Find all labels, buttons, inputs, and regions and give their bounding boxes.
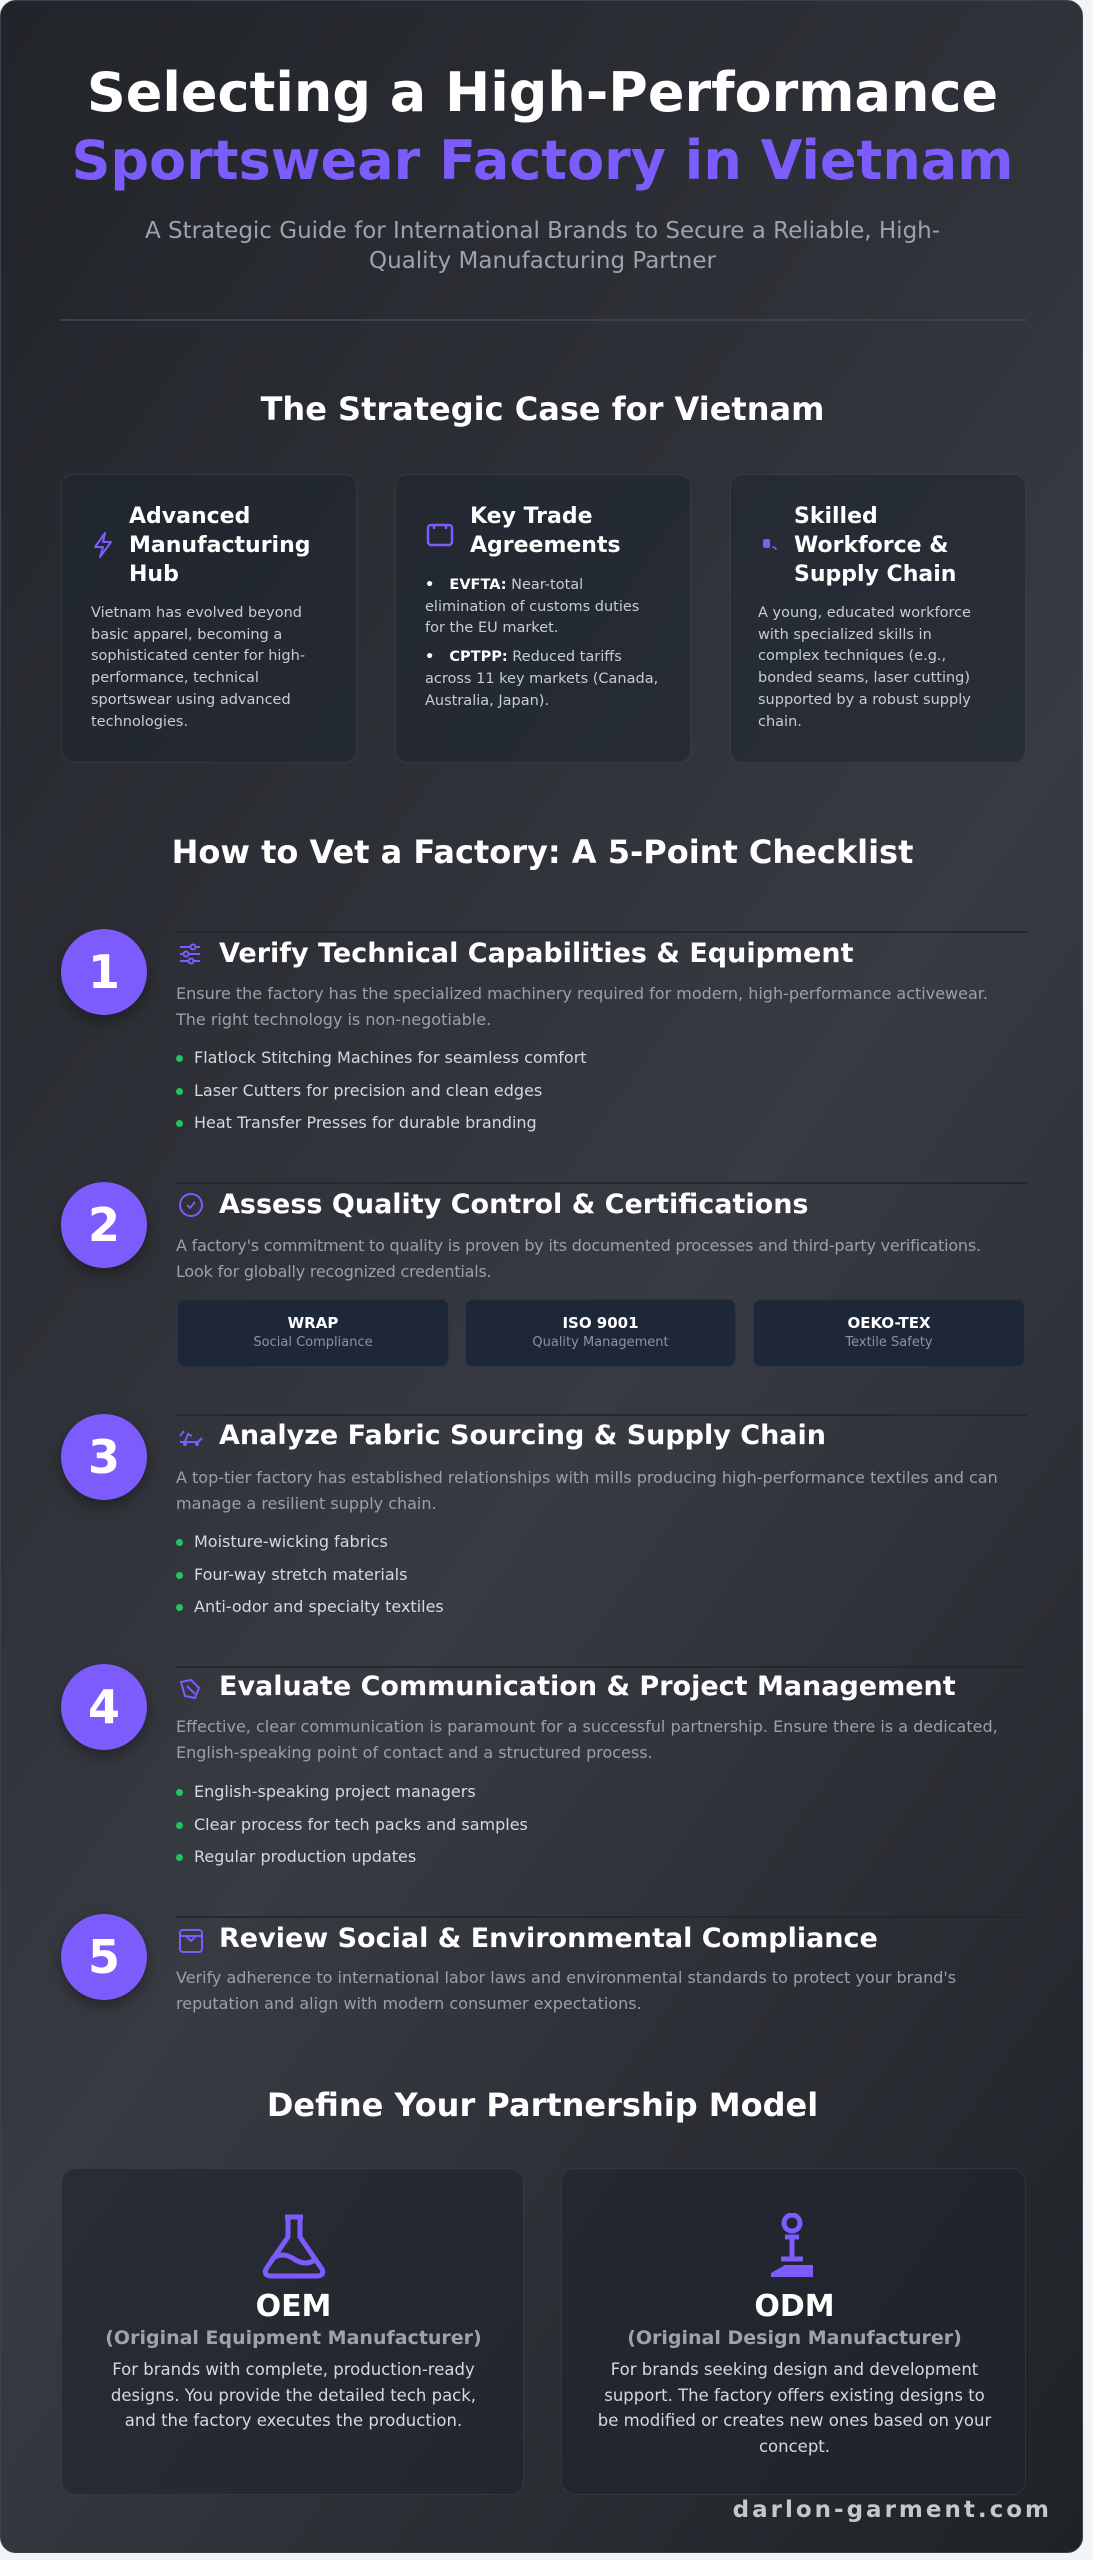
icon: sliders xyxy=(180,944,200,964)
icon: document xyxy=(426,524,454,546)
panel: advanced manufacturing hub: Vietnam has evolved beyond basic apparel, becoming a sophisticated center for high-performance, technical sportswear using advanced technologies. xyxy=(91,605,305,730)
step 1: Laser Cutters for precision and clean edges xyxy=(194,1081,542,1100)
step 5: Verify adherence to international labor laws and environmental standards to protect your brand's reputation and align with modern consumer expectations. xyxy=(176,1968,956,2012)
step 1 xyxy=(60,929,1027,1132)
icon: workforce xyxy=(763,539,777,550)
cert: ISO 9001: ISO 9001 xyxy=(562,1314,639,1332)
panel: advanced manufacturing hub: Manufacturing xyxy=(129,533,310,558)
cert: WRAP xyxy=(177,1299,449,1367)
step 4: Effective, clear communication is paramount for a successful partnership. Ensure there is a dedicated, English-speaking point of contact and a structured process. xyxy=(176,1717,998,1762)
panel: OEM: For brands with complete, production-ready designs. You provide the detailed tech pack, and the factory executes the production. xyxy=(111,2360,476,2430)
step 3 xyxy=(60,1414,1027,1616)
icon: joystick xyxy=(771,2213,813,2277)
panel: advanced manufacturing hub: Advanced xyxy=(129,504,250,529)
step 3: A top-tier factory has established relationships with mills producing high-performance textiles and can manage a resilient supply chain. xyxy=(176,1468,998,1512)
icon: check circle xyxy=(179,1193,203,1217)
title xyxy=(71,61,1014,192)
step 3: Moisture-wicking fabrics xyxy=(194,1532,388,1551)
subtitle: A Strategic Guide for International Brands to Secure a Reliable, High-Quality Manufacturing Partner xyxy=(145,218,940,274)
panel: advanced manufacturing hub xyxy=(61,474,357,763)
title: Selecting a High-Performance xyxy=(87,61,998,124)
panel: OEM: OEM xyxy=(256,2289,331,2324)
number 4: 4 xyxy=(88,1680,120,1734)
panel: key trade agreements: Agreements xyxy=(470,533,621,558)
step 4: English-speaking project managers xyxy=(194,1782,476,1801)
number 2 xyxy=(61,1182,147,1268)
panel: ODM xyxy=(561,2168,1026,2495)
number 4 xyxy=(61,1664,147,1750)
panel: skilled workforce: Skilled xyxy=(794,504,878,529)
step 4: Regular production updates xyxy=(194,1847,416,1866)
step 1: Flatlock Stitching Machines for seamless comfort xyxy=(194,1048,587,1067)
cert: OEKO-TEX: OEKO-TEX xyxy=(847,1314,931,1332)
step 4: Evaluate Communication & Project Management xyxy=(219,1671,956,1702)
panel: advanced manufacturing hub: Hub xyxy=(129,562,179,587)
step 1: Ensure the factory has the specialized machinery required for modern, high-performance activewear. The right technology is non-negotiable. xyxy=(176,984,988,1028)
heading: checklist: How to Vet a Factory: A 5-Point Checklist xyxy=(172,833,913,871)
panel: key trade agreements: • EVFTA: Near-total elimination of customs duties for the EU market. • CPTPP: Reduced tariffs across 11 key markets (Canada, Australia, Japan). xyxy=(425,577,658,709)
step 2: Assess Quality Control & Certifications xyxy=(219,1189,809,1220)
icon: lightning xyxy=(94,532,112,558)
step 3: Anti-odor and specialty textiles xyxy=(194,1597,444,1616)
step 1: Heat Transfer Presses for durable branding xyxy=(194,1113,537,1132)
step 5 xyxy=(59,1914,956,2012)
footer: brand url: darlon-garment.com xyxy=(733,2497,1052,2523)
heading: partnership model: Define Your Partnership Model xyxy=(267,2086,818,2124)
panel: ODM: For brands seeking design and development support. The factory offers existing designs to be modified or creates new ones based on your concept. xyxy=(598,2360,991,2456)
heading: strategic case: The Strategic Case for Vietnam xyxy=(261,390,824,428)
panel: ODM: (Original Design Manufacturer) xyxy=(627,2327,962,2349)
step 4 xyxy=(60,1664,998,1866)
icon: truck xyxy=(179,1430,203,1446)
icon: box xyxy=(179,1929,203,1953)
panel: skilled workforce: Supply Chain xyxy=(794,562,956,587)
step 1: Verify Technical Capabilities & Equipment xyxy=(219,938,854,969)
step 2 xyxy=(60,1182,1027,1280)
panel: OEM xyxy=(61,2168,524,2495)
icon: flask xyxy=(262,2214,326,2278)
cert: OEKO-TEX: Textile Safety xyxy=(845,1335,933,1350)
number 5 xyxy=(61,1914,147,2000)
number 1 xyxy=(61,929,147,1015)
cert: ISO 9001 xyxy=(465,1299,736,1367)
number 2: 2 xyxy=(88,1198,120,1252)
panel: key trade agreements: Key Trade xyxy=(470,504,593,529)
panel: skilled workforce: A young, educated workforce with specialized skills in complex techniques (e.g., bonded seams, laser cutting) supported by a robust supply chain. xyxy=(758,605,971,730)
panel: skilled workforce: Workforce & xyxy=(794,533,948,558)
title: Sportswear Factory in Vietnam xyxy=(71,129,1014,192)
number 3 xyxy=(61,1414,147,1500)
number 3: 3 xyxy=(88,1430,120,1484)
number 5: 5 xyxy=(88,1930,120,1984)
panel: skilled workforce xyxy=(730,474,1026,763)
cert: ISO 9001: Quality Management xyxy=(532,1335,669,1350)
step 5: Review Social & Environmental Compliance xyxy=(219,1923,878,1954)
step 3: Analyze Fabric Sourcing & Supply Chain xyxy=(219,1420,826,1451)
panel: key trade agreements xyxy=(395,474,691,763)
cert: WRAP: Social Compliance xyxy=(253,1335,373,1350)
step 3: Four-way stretch materials xyxy=(194,1565,407,1584)
panel: OEM: (Original Equipment Manufacturer) xyxy=(105,2327,482,2349)
step 4: Clear process for tech packs and samples xyxy=(194,1815,528,1834)
number 1: 1 xyxy=(88,945,120,999)
icon: chat xyxy=(180,1678,200,1700)
panel: ODM: ODM xyxy=(754,2289,835,2324)
cert: WRAP: WRAP xyxy=(288,1314,338,1332)
cert: OEKO-TEX xyxy=(753,1299,1025,1367)
step 2: A factory's commitment to quality is proven by its documented processes and third-party verifications. Look for globally recognized credentials. xyxy=(176,1236,981,1280)
